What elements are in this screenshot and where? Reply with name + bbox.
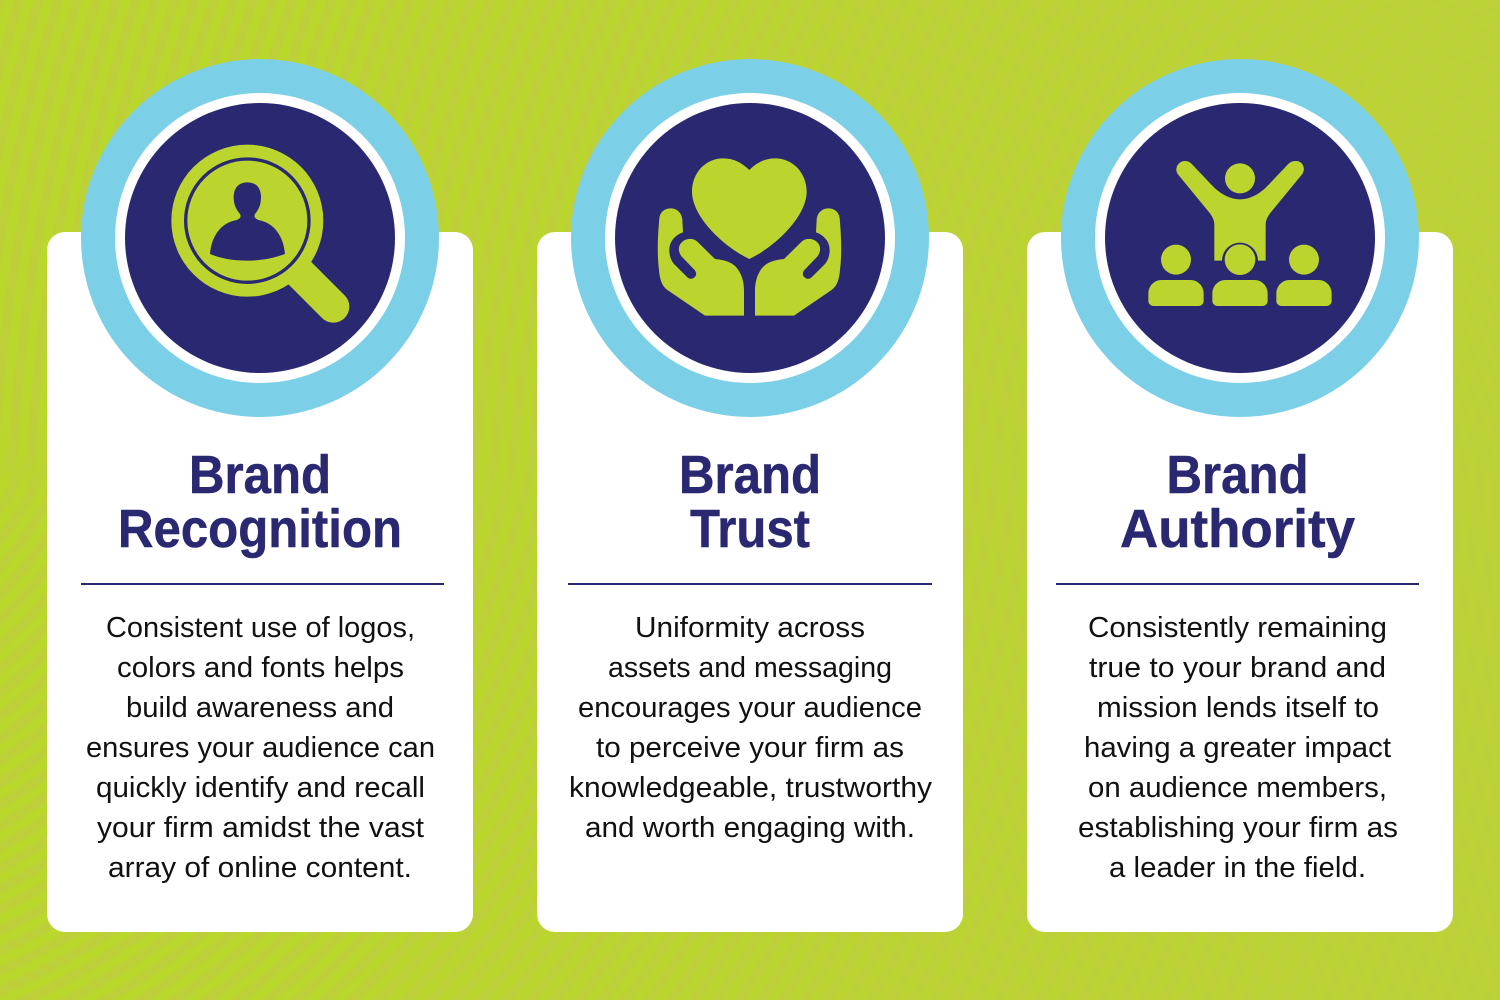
text block: brand trust description <box>569 612 933 844</box>
text block: brand trust description: and worth engaging with. <box>585 812 915 844</box>
text block: brand trust description: encourages your audience <box>578 692 922 724</box>
text block: brand authority description: mission lends itself to <box>1097 692 1379 724</box>
icon: magnifying glass with person <box>171 145 333 307</box>
heading: brand recognition: Recognition <box>118 499 402 559</box>
heading: brand authority: Authority <box>1120 499 1355 559</box>
card: brand recognition <box>47 232 473 932</box>
card: brand authority <box>1027 232 1453 932</box>
text block: brand authority description <box>1078 612 1398 884</box>
badge: brand authority circle <box>1061 59 1419 417</box>
panel: brand authority <box>1027 59 1453 932</box>
text block: brand trust description: to perceive your firm as <box>596 732 904 764</box>
card: brand trust <box>537 232 963 932</box>
icon: leader with audience <box>1148 161 1332 306</box>
heading: brand authority: Brand <box>1166 445 1308 505</box>
text block: brand trust description: knowledgeable, trustworthy <box>569 772 933 804</box>
text block: brand recognition description: quickly identify and recall <box>96 772 425 804</box>
icon: hands holding heart <box>658 158 841 316</box>
heading: brand authority <box>1120 445 1355 559</box>
heading: brand trust: Brand <box>679 445 821 505</box>
text block: brand recognition description: build awareness and <box>126 692 394 724</box>
text block: brand authority description: establishing your firm as <box>1078 812 1398 844</box>
text block: brand authority description: on audience members, <box>1088 772 1387 804</box>
text block: brand recognition description: colors and fonts helps <box>117 652 404 684</box>
badge: brand trust circle <box>571 59 929 417</box>
heading: brand recognition: Brand <box>189 445 331 505</box>
text block: brand authority description: true to your brand and <box>1089 652 1386 684</box>
text block: brand recognition description: Consistent use of logos, <box>106 612 415 644</box>
text block: brand recognition description: your firm amidst the vast <box>97 812 424 844</box>
badge: brand recognition circle <box>81 59 439 417</box>
text block: brand recognition description: array of online content. <box>108 852 412 884</box>
text block: brand recognition description: ensures your audience can <box>86 732 435 764</box>
text block: brand recognition description <box>86 612 435 884</box>
text block: brand trust description: Uniformity across <box>635 612 865 644</box>
panel: brand trust <box>537 59 963 932</box>
heading: brand trust <box>679 445 821 559</box>
heading: brand trust: Trust <box>690 499 810 559</box>
text block: brand authority description: having a greater impact <box>1084 732 1391 764</box>
heading: brand recognition <box>118 445 402 559</box>
text block: brand authority description: Consistently remaining <box>1088 612 1387 644</box>
panel: brand recognition <box>47 59 473 932</box>
text block: brand trust description: assets and messaging <box>608 652 892 684</box>
text block: brand authority description: a leader in the field. <box>1109 852 1366 884</box>
